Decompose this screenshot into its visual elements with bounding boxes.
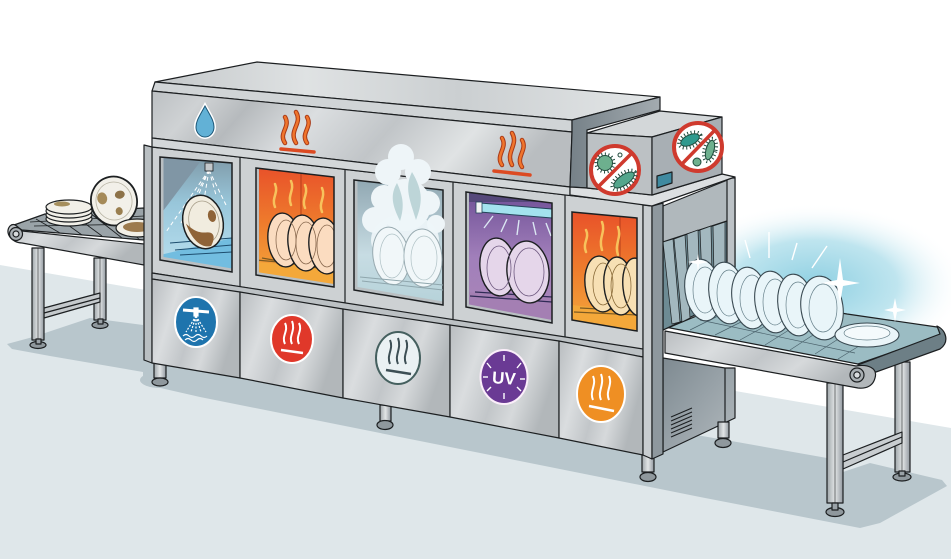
panel 4 [450,325,559,438]
sparkle rays [745,232,827,268]
plates in steam [369,225,444,288]
panel 1 [152,279,240,378]
panel 3 [343,309,450,417]
floor shadow [7,318,947,528]
no-bacteria sign 1 [591,146,639,194]
left conveyor side rail [8,225,144,265]
badge: wash [175,297,217,347]
steam cloud [362,144,445,266]
flat clean plate [835,323,899,347]
tunnel upper panel [663,177,735,330]
window 1: wash [160,155,233,275]
curtain strips [663,222,725,324]
hood side [570,97,660,188]
lower panels [152,279,643,455]
right conveyor legs [826,362,911,516]
window 3: steam [354,144,445,306]
panel 2 [240,292,343,398]
lower cabinet side [663,358,735,452]
dirty plate in wash [182,194,224,250]
UV lamp [480,203,552,218]
rack [259,257,316,268]
steam wisps [393,172,421,221]
badge: UV [480,350,528,404]
plates [584,255,636,316]
clean plates on right conveyor [681,232,906,347]
badge: steam [376,332,420,384]
dirty plates on left conveyor [45,176,144,238]
plates [477,236,552,305]
window 2: hot wash [255,167,335,288]
filter box [587,111,722,195]
blue glow behind clean plates [665,203,951,367]
hood top [155,62,660,120]
right conveyor side rail [665,331,876,388]
panel 5 [559,341,643,455]
drop icon [194,102,216,139]
divider band [152,273,643,357]
heat icon 1 [281,112,314,152]
plates [267,212,334,275]
vent [671,408,692,437]
right column [643,205,652,459]
no-bacteria sign 2 [674,123,722,171]
sparkles [688,254,906,322]
badge: hot wash [271,315,313,363]
plate stack [46,200,92,226]
left conveyor belt [14,208,144,240]
tunnel section [663,177,735,452]
badge: UV: UV [491,368,517,389]
upper front body [152,147,643,350]
upright plates [681,257,847,343]
top ledge [570,174,735,206]
heat icon 2 [494,133,530,175]
machine feet [152,362,731,482]
right conveyor [665,295,946,516]
left column [144,145,152,363]
floor [0,265,951,559]
rack [574,308,637,315]
window 4: UV [466,190,553,325]
flat dirty plate [115,218,144,238]
hood lip [152,82,572,132]
rack [470,292,552,302]
badge: sanitise heat [577,366,625,422]
right conveyor far rail [858,326,946,372]
left conveyor [8,208,144,348]
UV rays [484,216,551,236]
upright dirty plate [86,172,142,230]
machine body [144,62,735,482]
rack [170,238,232,255]
door dividers [240,157,565,339]
right conveyor belt [665,295,944,364]
spray [166,170,226,232]
left conveyor legs [30,248,108,348]
steam flames [274,181,323,212]
box display [657,172,672,188]
hood front [152,91,572,187]
window 5: sanitising [571,211,638,332]
flames [585,222,619,255]
